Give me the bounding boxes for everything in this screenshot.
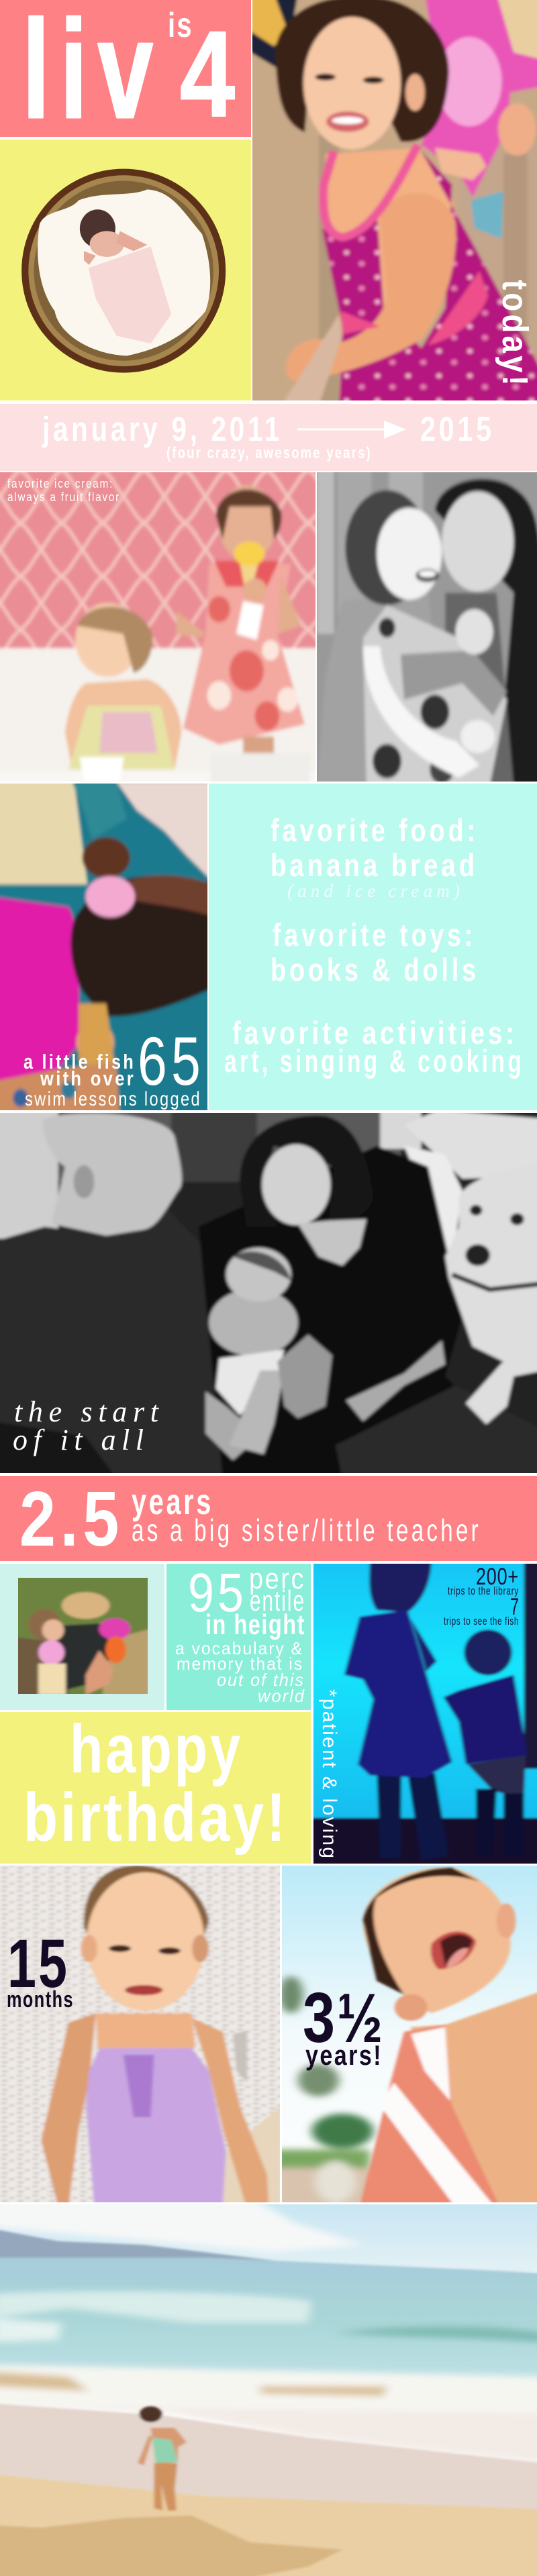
photo: hiking family xyxy=(18,1578,148,1694)
favorite toys: books & dolls xyxy=(271,952,479,987)
panel: yellow with newborn in basket xyxy=(0,140,251,400)
favorite food: (and ice cream) xyxy=(287,881,460,901)
photo: girl on the beach xyxy=(0,2198,537,2576)
title number 4: 4 xyxy=(180,5,235,142)
rotated label today!: today! xyxy=(495,280,535,388)
percentile word: perc xyxy=(249,1562,305,1595)
panel: big sister band xyxy=(0,1475,537,1562)
greeting heading: happy xyxy=(70,1711,243,1787)
stat: 65 swim lessons: with over xyxy=(40,1067,136,1090)
title word is: is xyxy=(168,6,193,45)
favorite activities xyxy=(224,1015,524,1079)
date caption: (four crazy, awesome years) xyxy=(166,444,372,462)
stat number 95: 95 xyxy=(188,1562,247,1623)
stat: 3 and a half years: ½ xyxy=(337,1980,383,2057)
panel: swim lessons photo xyxy=(0,777,215,1118)
caption: favorite ice cream: always a fruit flavor xyxy=(7,490,120,504)
stat number 2.5: 2.5 xyxy=(19,1475,124,1562)
panel: start of it all bw family photo xyxy=(0,1107,537,1479)
caption: the start of it all: the start xyxy=(14,1395,160,1428)
percentile word xyxy=(249,1562,305,1617)
panel: favorites xyxy=(209,784,537,1110)
panel: title liv is 4 xyxy=(0,0,251,148)
stat: 15 months: months xyxy=(7,1987,74,2012)
word years: years xyxy=(132,1482,213,1522)
favorite toys xyxy=(271,917,479,987)
vocabulary note: memory that is xyxy=(177,1654,303,1674)
vocabulary note: a vocabulary & xyxy=(175,1638,303,1658)
vocabulary note: out of this xyxy=(217,1670,305,1690)
favorite food: favorite food: xyxy=(271,812,479,848)
stat: 15 months: 15 xyxy=(7,1925,69,2002)
stat: 65 swim lessons: swim lessons logged xyxy=(25,1088,201,1110)
rotated label patient and loving: *patient & loving xyxy=(318,1689,340,1858)
stat: 65 swim lessons: a little fish xyxy=(23,1050,136,1073)
panel: 3 and a half years photo xyxy=(274,1861,537,2207)
library and fish stats: 7 xyxy=(510,1594,519,1620)
library and fish stats xyxy=(444,1564,519,1627)
panel: aquarium photo xyxy=(308,1558,537,1867)
greeting heading: birthday! xyxy=(23,1779,288,1856)
caption: the start of it all: of it all xyxy=(13,1424,144,1456)
photo: newborn in round basket xyxy=(21,169,226,373)
panel: ice cream photo xyxy=(0,466,322,788)
caption: the start of it all xyxy=(13,1395,160,1456)
start date: january 9, 2011 xyxy=(42,410,283,448)
panel: date band xyxy=(0,404,537,471)
stat: 65 swim lessons xyxy=(23,1023,205,1110)
greeting heading xyxy=(23,1711,288,1856)
in height: in height xyxy=(205,1609,305,1640)
panel: mother and daughter bw photo xyxy=(308,466,537,790)
vocabulary note xyxy=(175,1638,305,1706)
end year: 2015 xyxy=(420,410,495,448)
panel: pale mint with family photo xyxy=(0,1564,164,1710)
favorite food xyxy=(271,812,479,901)
stat: 3 and a half years xyxy=(303,1978,383,2071)
panel: percentile stats xyxy=(166,1562,311,1710)
panel: 15 months photo xyxy=(0,1861,288,2207)
library and fish stats: 200+ xyxy=(476,1564,519,1590)
panel: today photo xyxy=(240,0,537,407)
favorite food: banana bread xyxy=(271,847,478,883)
stat: 3 and a half years: 3 xyxy=(303,1978,335,2057)
percentile word: entile xyxy=(250,1585,305,1617)
stat: 3 and a half years: years! xyxy=(305,2039,383,2071)
panel: happy birthday xyxy=(0,1711,311,1864)
vocabulary note: world xyxy=(258,1686,305,1706)
caption: favorite ice cream xyxy=(7,477,120,504)
stat: 65 swim lessons: 65 xyxy=(138,1023,205,1099)
arrow: timeline xyxy=(297,421,406,439)
caption: favorite ice cream: favorite ice cream: xyxy=(7,477,113,490)
favorite toys: favorite toys: xyxy=(273,917,476,953)
